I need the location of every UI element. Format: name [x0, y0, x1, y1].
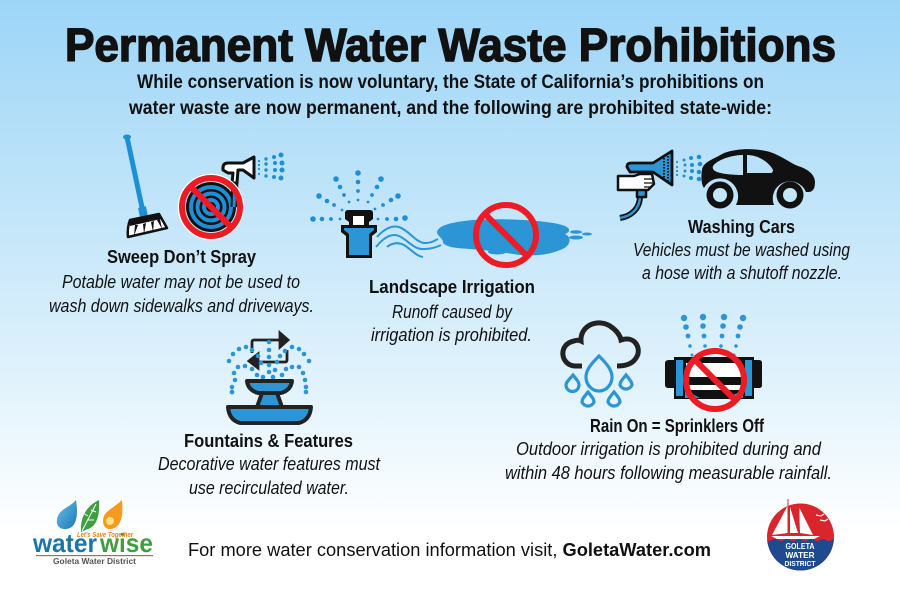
description: [505, 439, 832, 483]
description: a hose with a shutoff nozzle.: [642, 263, 842, 283]
icon: spray dots: [258, 152, 284, 180]
ship masts: [788, 499, 799, 534]
icon: rain cloud: [563, 323, 638, 366]
description: [158, 454, 381, 498]
description: [633, 240, 850, 283]
footer: water wise logo: [32, 500, 153, 566]
description: wash down sidewalks and driveways.: [49, 296, 314, 316]
icon: sprinkler head: [341, 210, 377, 258]
panel: landscape irrigation: [310, 170, 592, 345]
icon: broom: [123, 134, 167, 237]
footer text: For more water conservation information visit, GoletaWater.com: [188, 540, 711, 560]
seal text: [784, 541, 816, 568]
wordmark: water: water: [32, 528, 97, 558]
description: irrigation is prohibited.: [371, 325, 532, 345]
seal text: GOLETA: [786, 541, 814, 551]
panel: rain on sprinklers off: [505, 314, 832, 483]
panel: fountains and features: [158, 333, 381, 498]
intro text: water waste are now permanent, and the following are prohibited state-wide:: [128, 98, 772, 119]
tagline: Let’s Save Together: [77, 530, 134, 539]
panel: sweep don't spray: [49, 134, 314, 316]
icon: water drop: [57, 500, 77, 529]
divider line: [36, 555, 153, 556]
description: [49, 272, 314, 316]
description: [371, 302, 532, 345]
icon: leaf: [81, 500, 99, 532]
icon: spray dots on car: [697, 155, 702, 181]
seal top: [767, 504, 834, 570]
icon: seagulls: [816, 514, 828, 521]
heading: Washing Cars: [688, 217, 795, 237]
description: Decorative water features must: [158, 454, 381, 474]
description: within 48 hours following measurable rainfall.: [505, 463, 832, 483]
icon: prohibition sign: [476, 205, 536, 265]
intro text: [128, 72, 772, 119]
wordmark: wise: wise: [99, 528, 153, 558]
description: use recirculated water.: [189, 478, 349, 498]
icon: fountain basins: [228, 381, 311, 423]
heading: Rain On = Sprinklers Off: [590, 416, 765, 436]
icon: spray dots: [676, 156, 694, 180]
icon: water dots: [227, 340, 311, 394]
icon: dots above sprinkler: [681, 314, 746, 356]
icon: sprinkler dots: [310, 170, 408, 222]
title: Permanent Water Waste Prohibitions: [65, 19, 836, 71]
icon: recirculation arrows: [249, 333, 288, 368]
panel: washing cars: [618, 149, 850, 283]
icon: spray nozzle with hand: [618, 151, 672, 218]
heading: Sweep Don’t Spray: [107, 247, 256, 267]
icon: hose with prohibition sign: [178, 157, 254, 240]
heading: Fountains & Features: [184, 431, 353, 451]
seal text: WATER: [786, 550, 814, 560]
icon: puddle: [437, 219, 592, 255]
seal text: DISTRICT: [784, 561, 816, 568]
icon: ship sails: [771, 505, 820, 539]
icon: orange drop: [103, 500, 122, 529]
description: Vehicles must be washed using: [633, 240, 850, 260]
icon: rain drops: [566, 356, 632, 406]
icon: car: [701, 149, 815, 208]
district name: Goleta Water District: [53, 557, 136, 566]
description: Runoff caused by: [392, 302, 513, 322]
icon: runoff waves: [376, 226, 441, 257]
intro text: While conservation is now voluntary, the State of California’s prohibitions on: [137, 72, 764, 93]
icon: sprinkler head: [665, 357, 762, 399]
footer: goleta water district seal: [767, 499, 834, 570]
seal bottom: [767, 539, 834, 570]
description: Outdoor irrigation is prohibited during and: [516, 439, 822, 459]
icon: prohibition sign: [686, 351, 744, 409]
heading: Landscape Irrigation: [369, 277, 535, 297]
description: Potable water may not be used to: [62, 272, 300, 292]
